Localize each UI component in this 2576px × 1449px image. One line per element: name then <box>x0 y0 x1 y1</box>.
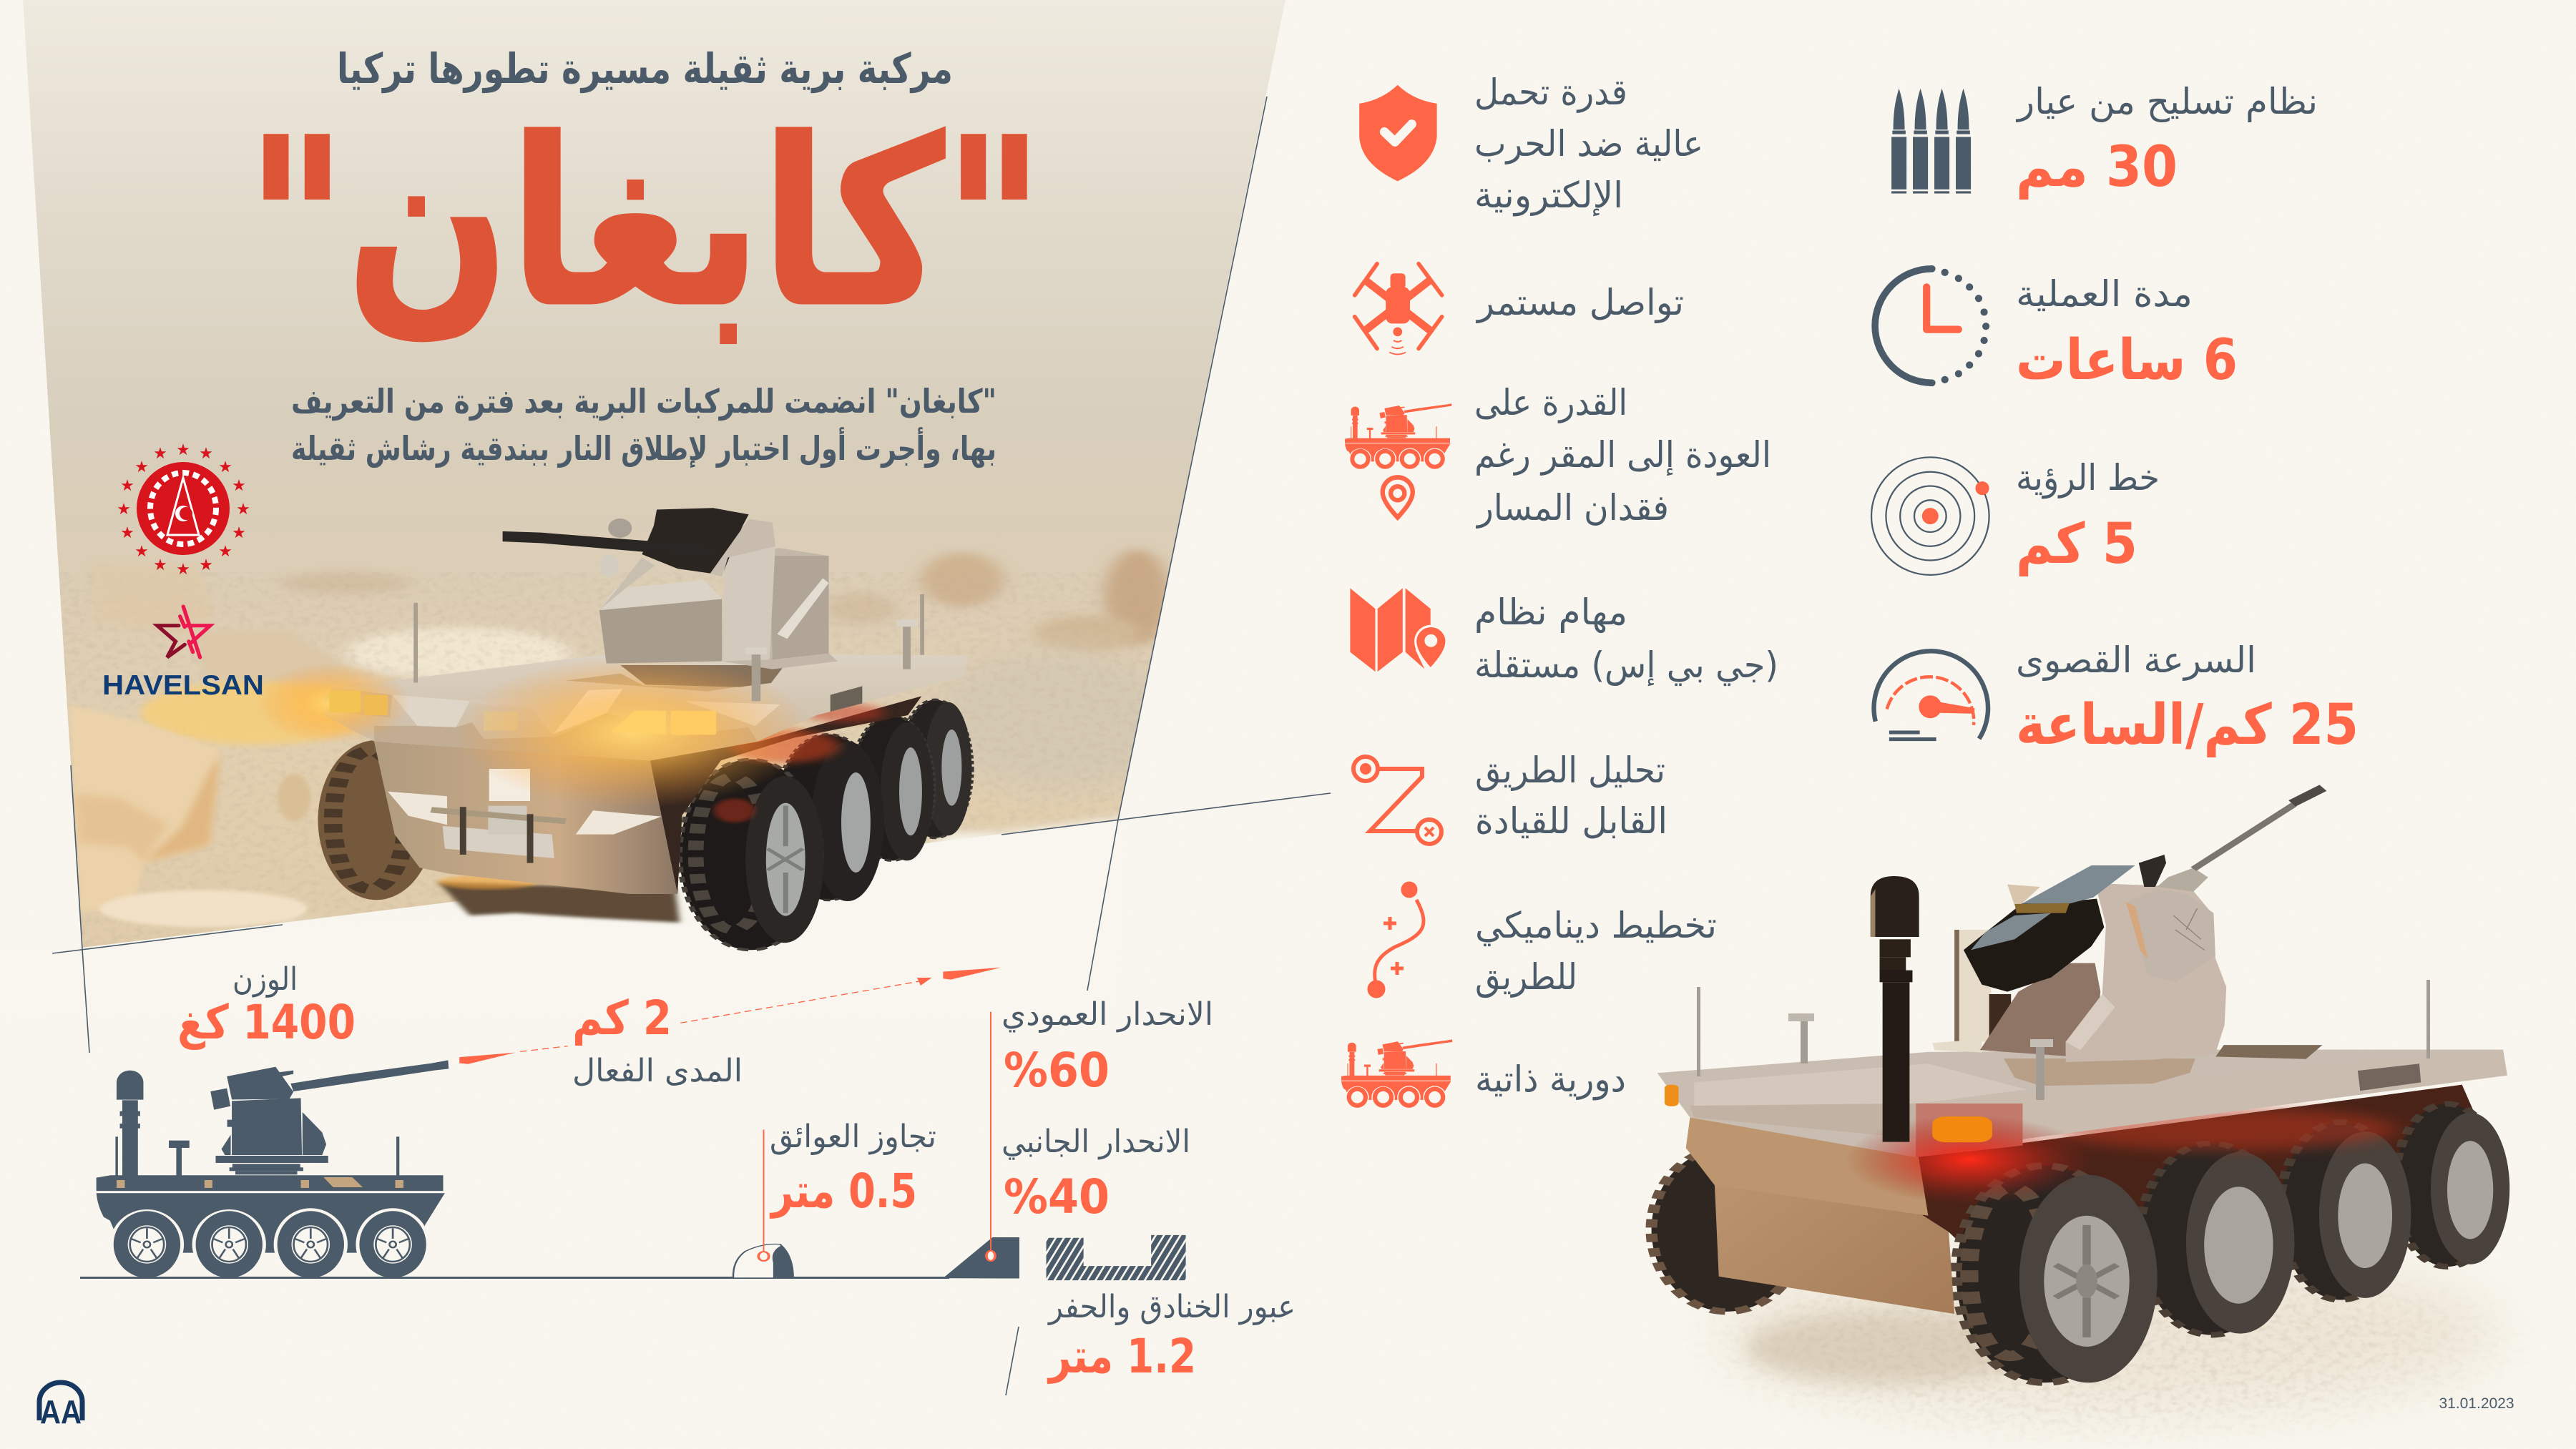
effective range <box>572 991 743 1089</box>
side red glow <box>2052 1108 2396 1150</box>
deck <box>324 653 967 760</box>
logo: SSB emblem: ★ <box>236 500 250 518</box>
icon: vehicle return silhouette <box>1345 403 1451 470</box>
logo: SSB emblem: ★ <box>199 556 213 574</box>
obstacle: تجاوز العوائق <box>770 1119 936 1155</box>
vertical slope: الانحدار العمودي <box>1001 996 1213 1033</box>
spec: weapon calibre: 30 مم <box>2016 135 2178 200</box>
subtitle: مركبة برية ثقيلة مسيرة تطورها تركيا <box>337 44 953 94</box>
icon: shield <box>1359 85 1437 181</box>
logo: SSB emblem: ★ <box>176 560 190 578</box>
effective range: المدى الفعال <box>572 1053 743 1089</box>
leader lines <box>52 97 1331 1395</box>
main title: "كابغان" <box>247 91 1044 357</box>
sensor mast <box>1871 876 1919 1142</box>
gravel ground under second vehicle <box>1710 1244 2507 1438</box>
feature: route analysis: القابل للقيادة <box>1475 800 1667 842</box>
rear-left wheel <box>1652 1148 1803 1312</box>
bullet far <box>943 968 1001 980</box>
feature: EW resistance: الإلكترونية <box>1474 175 1623 217</box>
spec: duration: مدة العملية <box>2016 273 2193 315</box>
feature: continuous communication: تواصل مستمر <box>1475 282 1684 323</box>
far wheels <box>680 699 971 950</box>
side slope <box>1001 1124 1190 1224</box>
side vent <box>831 686 862 712</box>
feature: return home: القدرة على <box>1474 382 1627 423</box>
trench crossing: عبور الخنادق والحفر <box>1047 1289 1296 1325</box>
feature: return home: العودة إلى المقر رغم <box>1474 434 1771 476</box>
spec: top speed: 25 كم/الساعة <box>2016 693 2359 757</box>
date: 31.01.2023 <box>2439 1395 2514 1412</box>
ramp <box>877 1237 1019 1279</box>
icon: dynamic route planning <box>1369 883 1424 996</box>
feature: dynamic planning: للطريق <box>1475 956 1577 998</box>
ground fade under first vehicle <box>283 817 1125 1016</box>
logo: Havelsan <box>102 606 264 701</box>
logo: SSB emblem: ★ <box>232 524 246 541</box>
feature list text <box>1474 72 1778 1101</box>
deck markings <box>117 1177 403 1188</box>
feature: return home <box>1474 382 1771 529</box>
feature: route analysis: تحليل الطريق <box>1475 750 1665 791</box>
icon: patrol vehicle silhouette <box>1341 1039 1452 1109</box>
left wheel <box>318 740 435 900</box>
spec: duration: 6 ساعات <box>2016 328 2238 393</box>
icon: route analysis <box>1353 757 1441 844</box>
description: "كابغان" انضمت للمركبات البرية بعد فترة من التعريف <box>291 382 996 421</box>
large boulder <box>69 705 220 911</box>
wheel spokes <box>130 1227 410 1262</box>
posts and antennae <box>1697 980 2430 1100</box>
icon: clock <box>1875 269 1989 383</box>
trench crossing: 1.2 متر <box>1047 1329 1196 1384</box>
dashed path <box>520 981 919 1051</box>
spec: line of sight <box>2016 457 2160 576</box>
silhouette: vehicle side view <box>97 1060 449 1281</box>
feature: GPS independent: مهام نظام <box>1474 591 1627 634</box>
logo: SSB emblem: ★ <box>117 500 131 518</box>
bullet near <box>459 1053 516 1064</box>
feature: dynamic planning: تخطيط ديناميكي <box>1475 905 1717 946</box>
tail lights <box>1932 1116 1992 1142</box>
logo: SSB emblem: ★ <box>232 476 246 494</box>
ground line <box>80 1277 949 1279</box>
logo: Havelsan: HAVELSAN <box>102 670 264 701</box>
flat rock <box>202 630 342 681</box>
spec: duration <box>2016 273 2238 393</box>
side slope: %40 <box>1004 1169 1110 1224</box>
deck <box>1657 1050 2507 1157</box>
vertical slope <box>1001 996 1213 1098</box>
weight: 1400 كغ <box>177 995 356 1050</box>
specs bottom left <box>177 961 1296 1384</box>
logo: AA <box>39 1382 82 1430</box>
spec: top speed: السرعة القصوى <box>2016 639 2256 681</box>
feature: dynamic planning <box>1475 905 1717 998</box>
description: بها، وأجرت أول اختبار لإطلاق النار ببندقية رشاش ثقيلة <box>291 427 996 468</box>
icon: bullets <box>1891 89 1971 194</box>
logo: SSB emblem: ★ <box>199 444 213 462</box>
weight: الوزن <box>232 961 298 998</box>
weight <box>177 961 356 1050</box>
logo: AA: AA <box>40 1393 82 1430</box>
feature: autonomous patrol: دورية ذاتية <box>1475 1058 1626 1101</box>
feature: route analysis <box>1475 750 1667 842</box>
posts and antennae <box>413 594 924 701</box>
icon: radar target <box>1871 457 1989 575</box>
icon: map <box>1350 588 1446 672</box>
dark side underbody <box>650 696 921 894</box>
distant tan rock <box>95 565 208 633</box>
spec: top speed <box>2016 639 2359 757</box>
deck seam <box>97 1191 444 1192</box>
spec: line of sight: 5 كم <box>2016 512 2137 576</box>
obstacle: rock <box>733 1244 793 1278</box>
far wheels <box>1956 1104 2509 1382</box>
obstacle <box>770 1119 936 1219</box>
logo: SSB emblem: ★ <box>176 441 190 458</box>
feature: return home: فقدان المسار <box>1475 487 1669 529</box>
slope marker <box>986 1012 995 1261</box>
winch <box>431 806 566 863</box>
glow <box>141 681 371 745</box>
logo: SSB emblem: ★ <box>153 444 167 462</box>
headlights and glow <box>255 656 812 808</box>
arrow head <box>917 978 932 986</box>
spec: line of sight: خط الرؤية <box>2016 457 2160 499</box>
vehicle photo: Kapgan front view <box>255 508 971 950</box>
turret <box>1933 788 2323 1086</box>
left edge paper <box>0 926 283 1016</box>
description <box>291 382 996 468</box>
logo: SSB emblem: ★ <box>218 542 232 560</box>
trench crossing <box>1047 1289 1296 1384</box>
logo: SSB emblem: ★ <box>134 458 149 476</box>
dark side underbody <box>1916 1085 2479 1244</box>
hull <box>374 742 677 894</box>
feature: EW resistance: قدرة تحمل <box>1474 72 1627 113</box>
range trajectory <box>459 968 1186 1280</box>
feature: EW resistance <box>1474 72 1703 217</box>
logo: SSB emblem: ★ <box>134 542 149 560</box>
feature: EW resistance: عالية ضد الحرب <box>1474 123 1703 164</box>
icon: speedometer <box>1874 651 1988 741</box>
side slope: الانحدار الجانبي <box>1001 1124 1190 1160</box>
white plates <box>388 792 447 825</box>
panel: desert photo <box>23 0 1285 958</box>
icon: drone <box>1355 264 1442 354</box>
feature list icons <box>1350 85 1989 741</box>
vertical slope: %60 <box>1004 1043 1110 1098</box>
vehicle photo: Kapgan rear view <box>1652 788 2509 1382</box>
spec: weapon calibre <box>2015 81 2318 200</box>
pale stones <box>100 890 308 927</box>
obstacle: 0.5 متر <box>770 1164 917 1219</box>
dry grass <box>278 774 310 821</box>
feature: GPS independent: (جي بي إس) مستقلة <box>1474 644 1778 687</box>
logo: SSB emblem: ★ <box>153 556 167 574</box>
obstacle marker <box>758 1130 769 1261</box>
turret <box>503 508 838 669</box>
spec: weapon calibre: نظام تسليح من عيار <box>2015 81 2318 123</box>
rear hull <box>1686 1117 1954 1314</box>
logo: SSB emblem: ★ <box>120 524 134 541</box>
trench <box>1047 1235 1186 1280</box>
logo: SSB emblem: ★ <box>120 476 134 494</box>
logo: SSB emblem <box>117 441 250 578</box>
lower hull and wheels <box>255 653 971 950</box>
sensor <box>484 712 518 731</box>
effective range: 2 كم <box>572 991 672 1046</box>
icon: location pin <box>1383 477 1413 518</box>
ground clods <box>438 882 680 923</box>
logo: SSB emblem: ★ <box>218 458 232 476</box>
feature: GPS independent <box>1474 591 1778 687</box>
tail block <box>1916 1104 2022 1157</box>
key specs right column <box>2015 81 2359 757</box>
